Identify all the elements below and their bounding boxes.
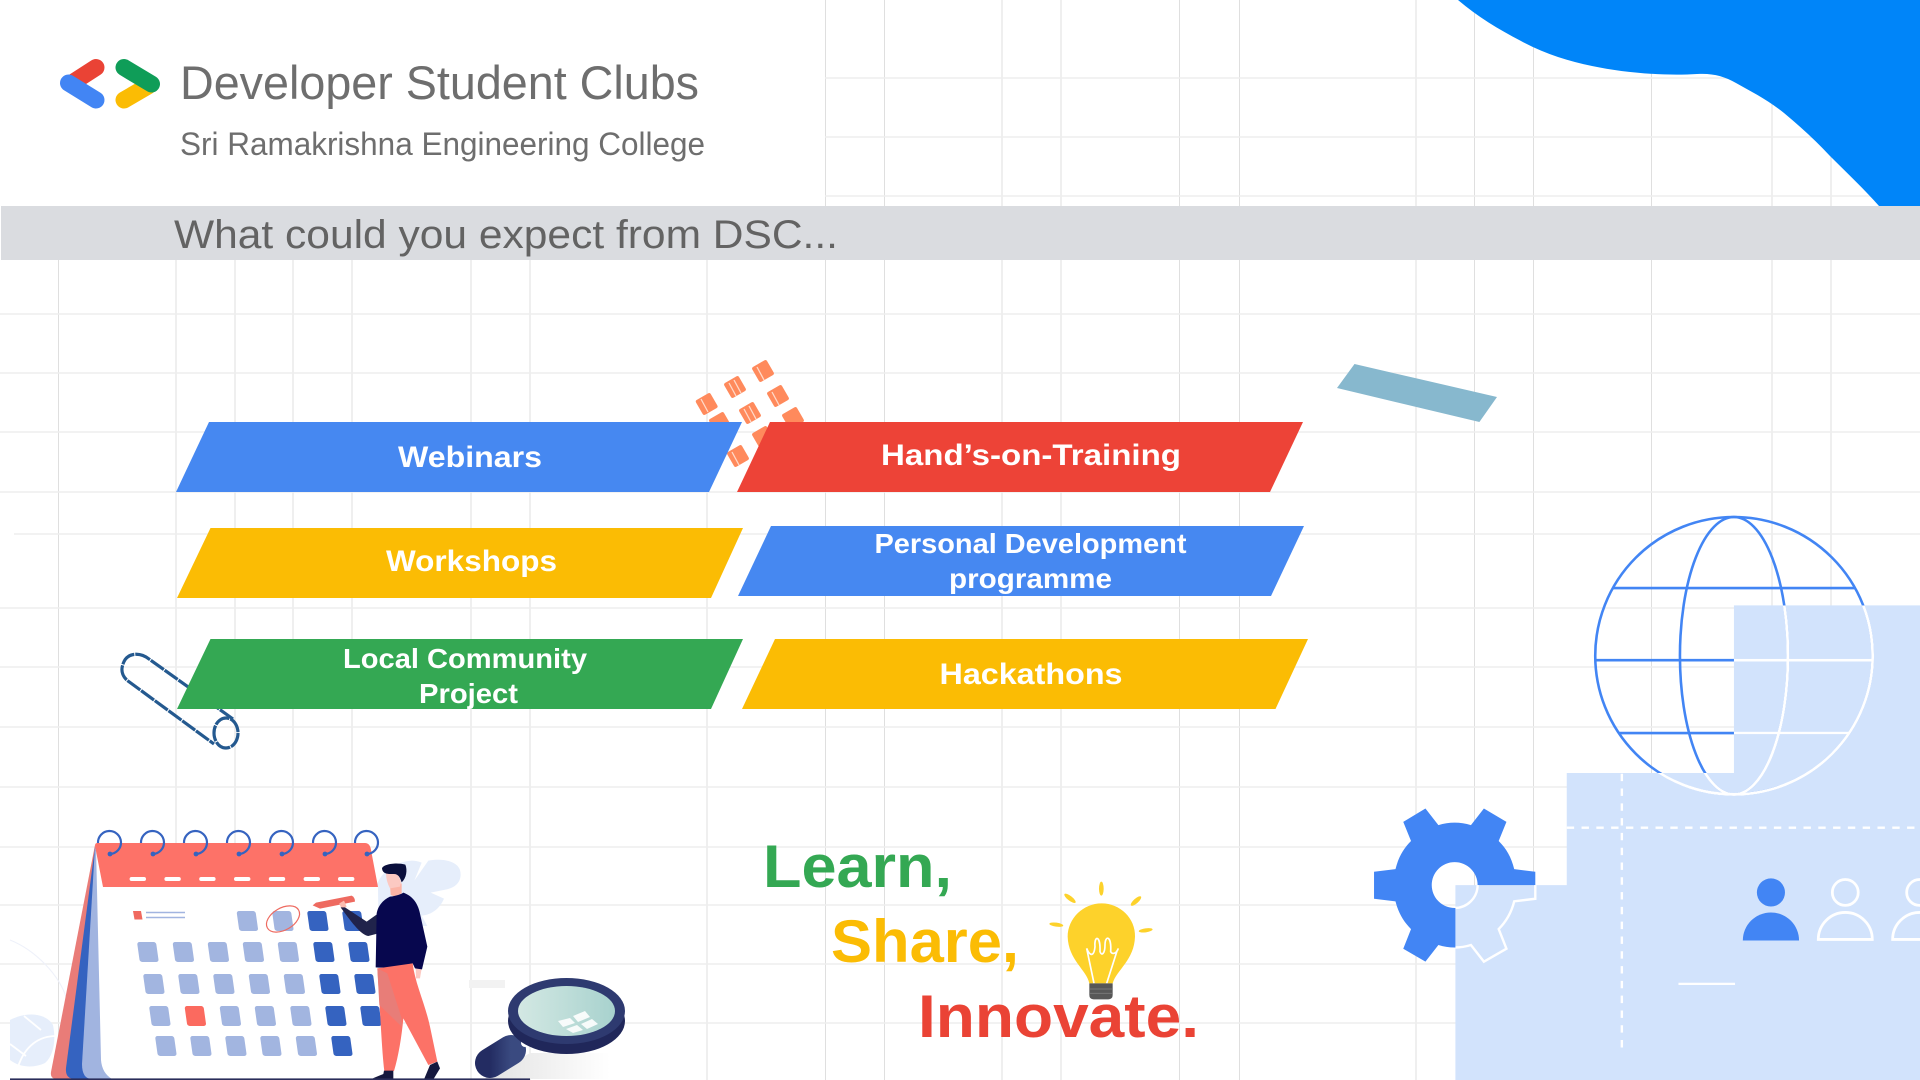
- tag: Local Community Project: Local Community: [343, 643, 587, 674]
- light blue stepped panel: [1455, 605, 1920, 1080]
- decorative leaf behind person: [377, 860, 461, 926]
- tag: Workshops: [177, 528, 743, 598]
- icon: light bulb: [1049, 882, 1153, 999]
- tag: Hackathons: [742, 639, 1308, 709]
- icon: gear: [1374, 808, 1535, 962]
- magnifying glass: [469, 978, 625, 1079]
- slogan: Innovate: Innovate.: [918, 983, 1199, 1050]
- tag: Hand's-on-Training: Hand’s-on-Training: [881, 439, 1181, 472]
- tag: Webinars: Webinars: [398, 441, 542, 474]
- tag: Workshops: Workshops: [386, 545, 557, 578]
- circled date: [262, 900, 304, 938]
- decorative sketched tube: [122, 654, 238, 748]
- ring ends: [108, 852, 369, 856]
- calendar header: [95, 843, 378, 887]
- subtitle: college name: Sri Ramakrishna Engineering College: [180, 126, 705, 162]
- illustration: steps panel, globe, gear and people: [1374, 517, 1920, 1080]
- icon: globe: [1595, 517, 1873, 794]
- slogan: Learn: Learn,: [763, 833, 952, 900]
- tag: Personal Development programme: Personal Development: [874, 528, 1186, 559]
- tag: Hand's-on-Training: [737, 422, 1303, 492]
- tag: Personal Development programme: [738, 526, 1304, 596]
- header dashes: [130, 877, 354, 881]
- icon: outlined person, cropped: [1893, 880, 1920, 939]
- tag: Local Community Project: [177, 639, 743, 709]
- tag: Personal Development programme: programme: [949, 563, 1112, 594]
- heading text: What could you expect from DSC...: [174, 213, 838, 257]
- heading band: [1, 206, 1920, 260]
- calendar back sheets: [51, 845, 380, 1079]
- icon: active person: [1743, 878, 1799, 941]
- month legend: [133, 911, 185, 920]
- tag: Webinars: [176, 422, 742, 492]
- title: Developer Student Clubs: Developer Student Clubs: [180, 56, 699, 109]
- icon: outlined person: [1818, 880, 1872, 939]
- tag: Local Community Project: Project: [419, 678, 518, 709]
- spiral rings: [98, 831, 378, 854]
- logo: Developer Student Clubs chevrons: [68, 68, 152, 100]
- person with pencil: [313, 863, 440, 1079]
- teal tape rectangle: [1337, 364, 1497, 422]
- decorative leaf, bottom left: [10, 940, 67, 1067]
- tag: Hackathons: Hackathons: [940, 658, 1122, 691]
- ground line: [10, 1078, 530, 1080]
- decorative orange gift boxes: [695, 359, 805, 468]
- calendar illustration: [51, 831, 382, 1079]
- date cells: [137, 911, 382, 1056]
- slogan: Share: Share,: [831, 908, 1019, 975]
- decorative blue blob, top right: [1458, 0, 1920, 206]
